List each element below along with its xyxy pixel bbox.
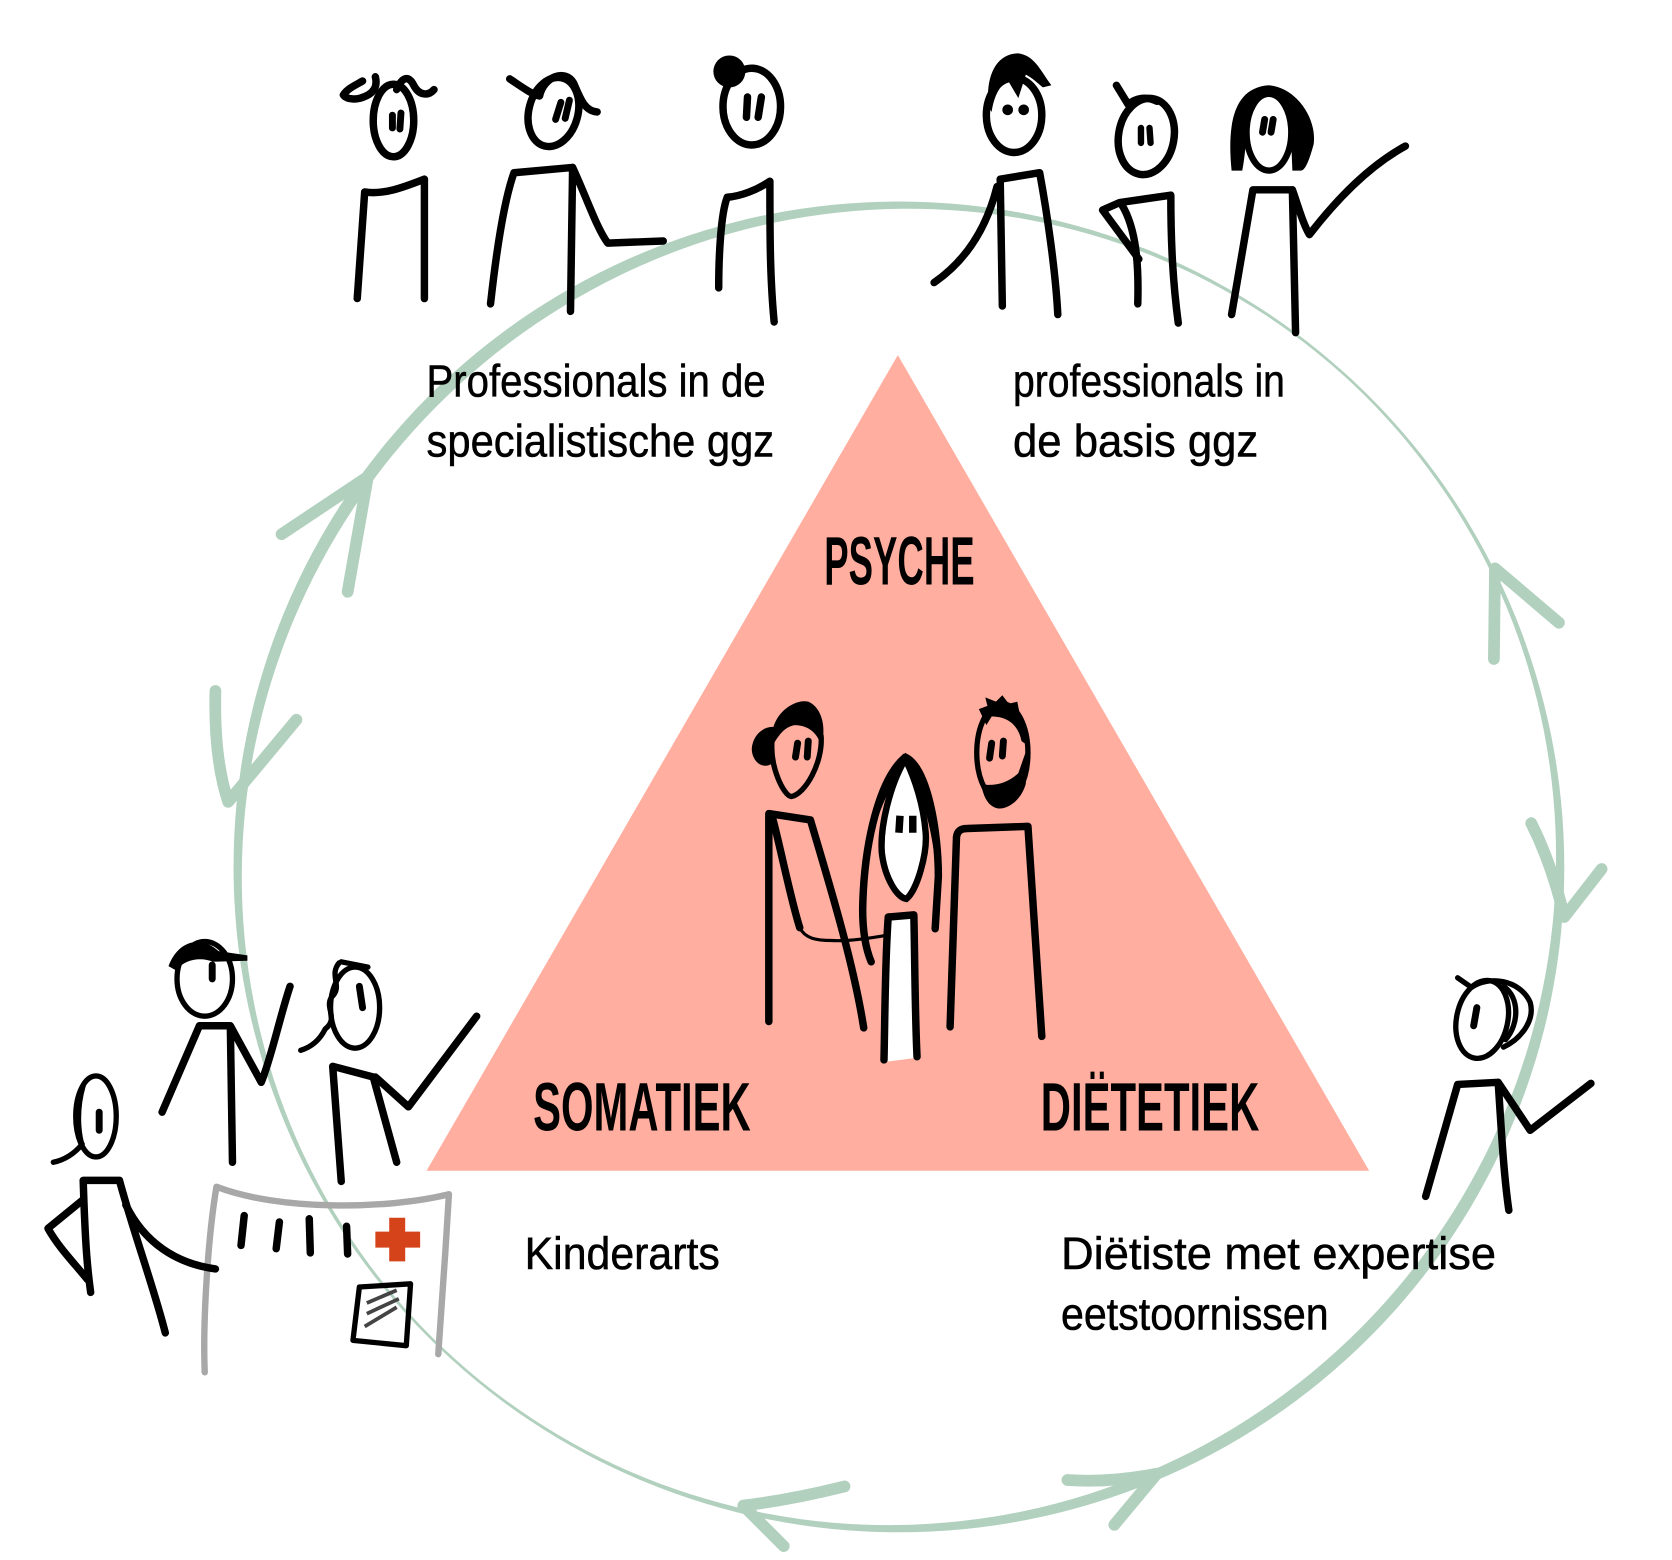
label: dietitian: Diëtiste met expertise — [1061, 1227, 1496, 1279]
label: specialist care: Professionals in de — [427, 355, 766, 407]
icon: medical board — [204, 1187, 449, 1372]
figure: left woman — [343, 77, 434, 299]
label: specialist care: specialistische ggz — [427, 414, 774, 466]
group: pediatric care — [48, 942, 477, 1372]
group: basic care professionals — [934, 53, 1405, 333]
arrow: top left — [282, 477, 368, 592]
arrow: upper right — [1494, 568, 1559, 659]
arrow: left — [215, 691, 296, 802]
figure: woman with long hair pointing — [1230, 85, 1405, 333]
figure: middle person pointing — [491, 72, 663, 311]
figure: person with cap — [162, 942, 290, 1162]
figure: child — [863, 756, 938, 1062]
figure: left person — [48, 1076, 215, 1333]
figure: man with quiff — [934, 53, 1058, 315]
label: basic care: de basis ggz — [1013, 414, 1258, 466]
icon: clipboard — [353, 1284, 411, 1346]
group: central three figures — [752, 695, 1042, 1062]
figure: person with curly hair — [301, 962, 477, 1181]
figure: woman with bun — [752, 701, 887, 1028]
figure: dietitian — [1426, 975, 1591, 1210]
arrow: right — [1531, 823, 1602, 917]
heading: somatiek: SOMATIEK — [533, 1069, 751, 1145]
label: basic care — [1013, 355, 1285, 466]
figure: bearded man — [950, 695, 1042, 1036]
heading: dietetiek: DIËTETIEK — [1041, 1069, 1259, 1145]
label: specialist care — [427, 355, 774, 466]
group: specialist professionals — [343, 55, 781, 322]
figure: person with hand on hip — [1103, 85, 1180, 323]
label: basic care: professionals in — [1013, 355, 1285, 407]
arrow: bottom right — [1067, 1474, 1157, 1525]
heading: psyche: PSYCHE — [824, 523, 975, 599]
figure: woman with bun — [713, 55, 781, 322]
label: dietitian: eetstoornissen — [1061, 1288, 1329, 1340]
label: dietitian — [1061, 1227, 1496, 1340]
arrow: bottom left — [743, 1486, 845, 1546]
label: pediatrician: Kinderarts — [525, 1227, 720, 1279]
triangle — [427, 355, 1369, 1171]
